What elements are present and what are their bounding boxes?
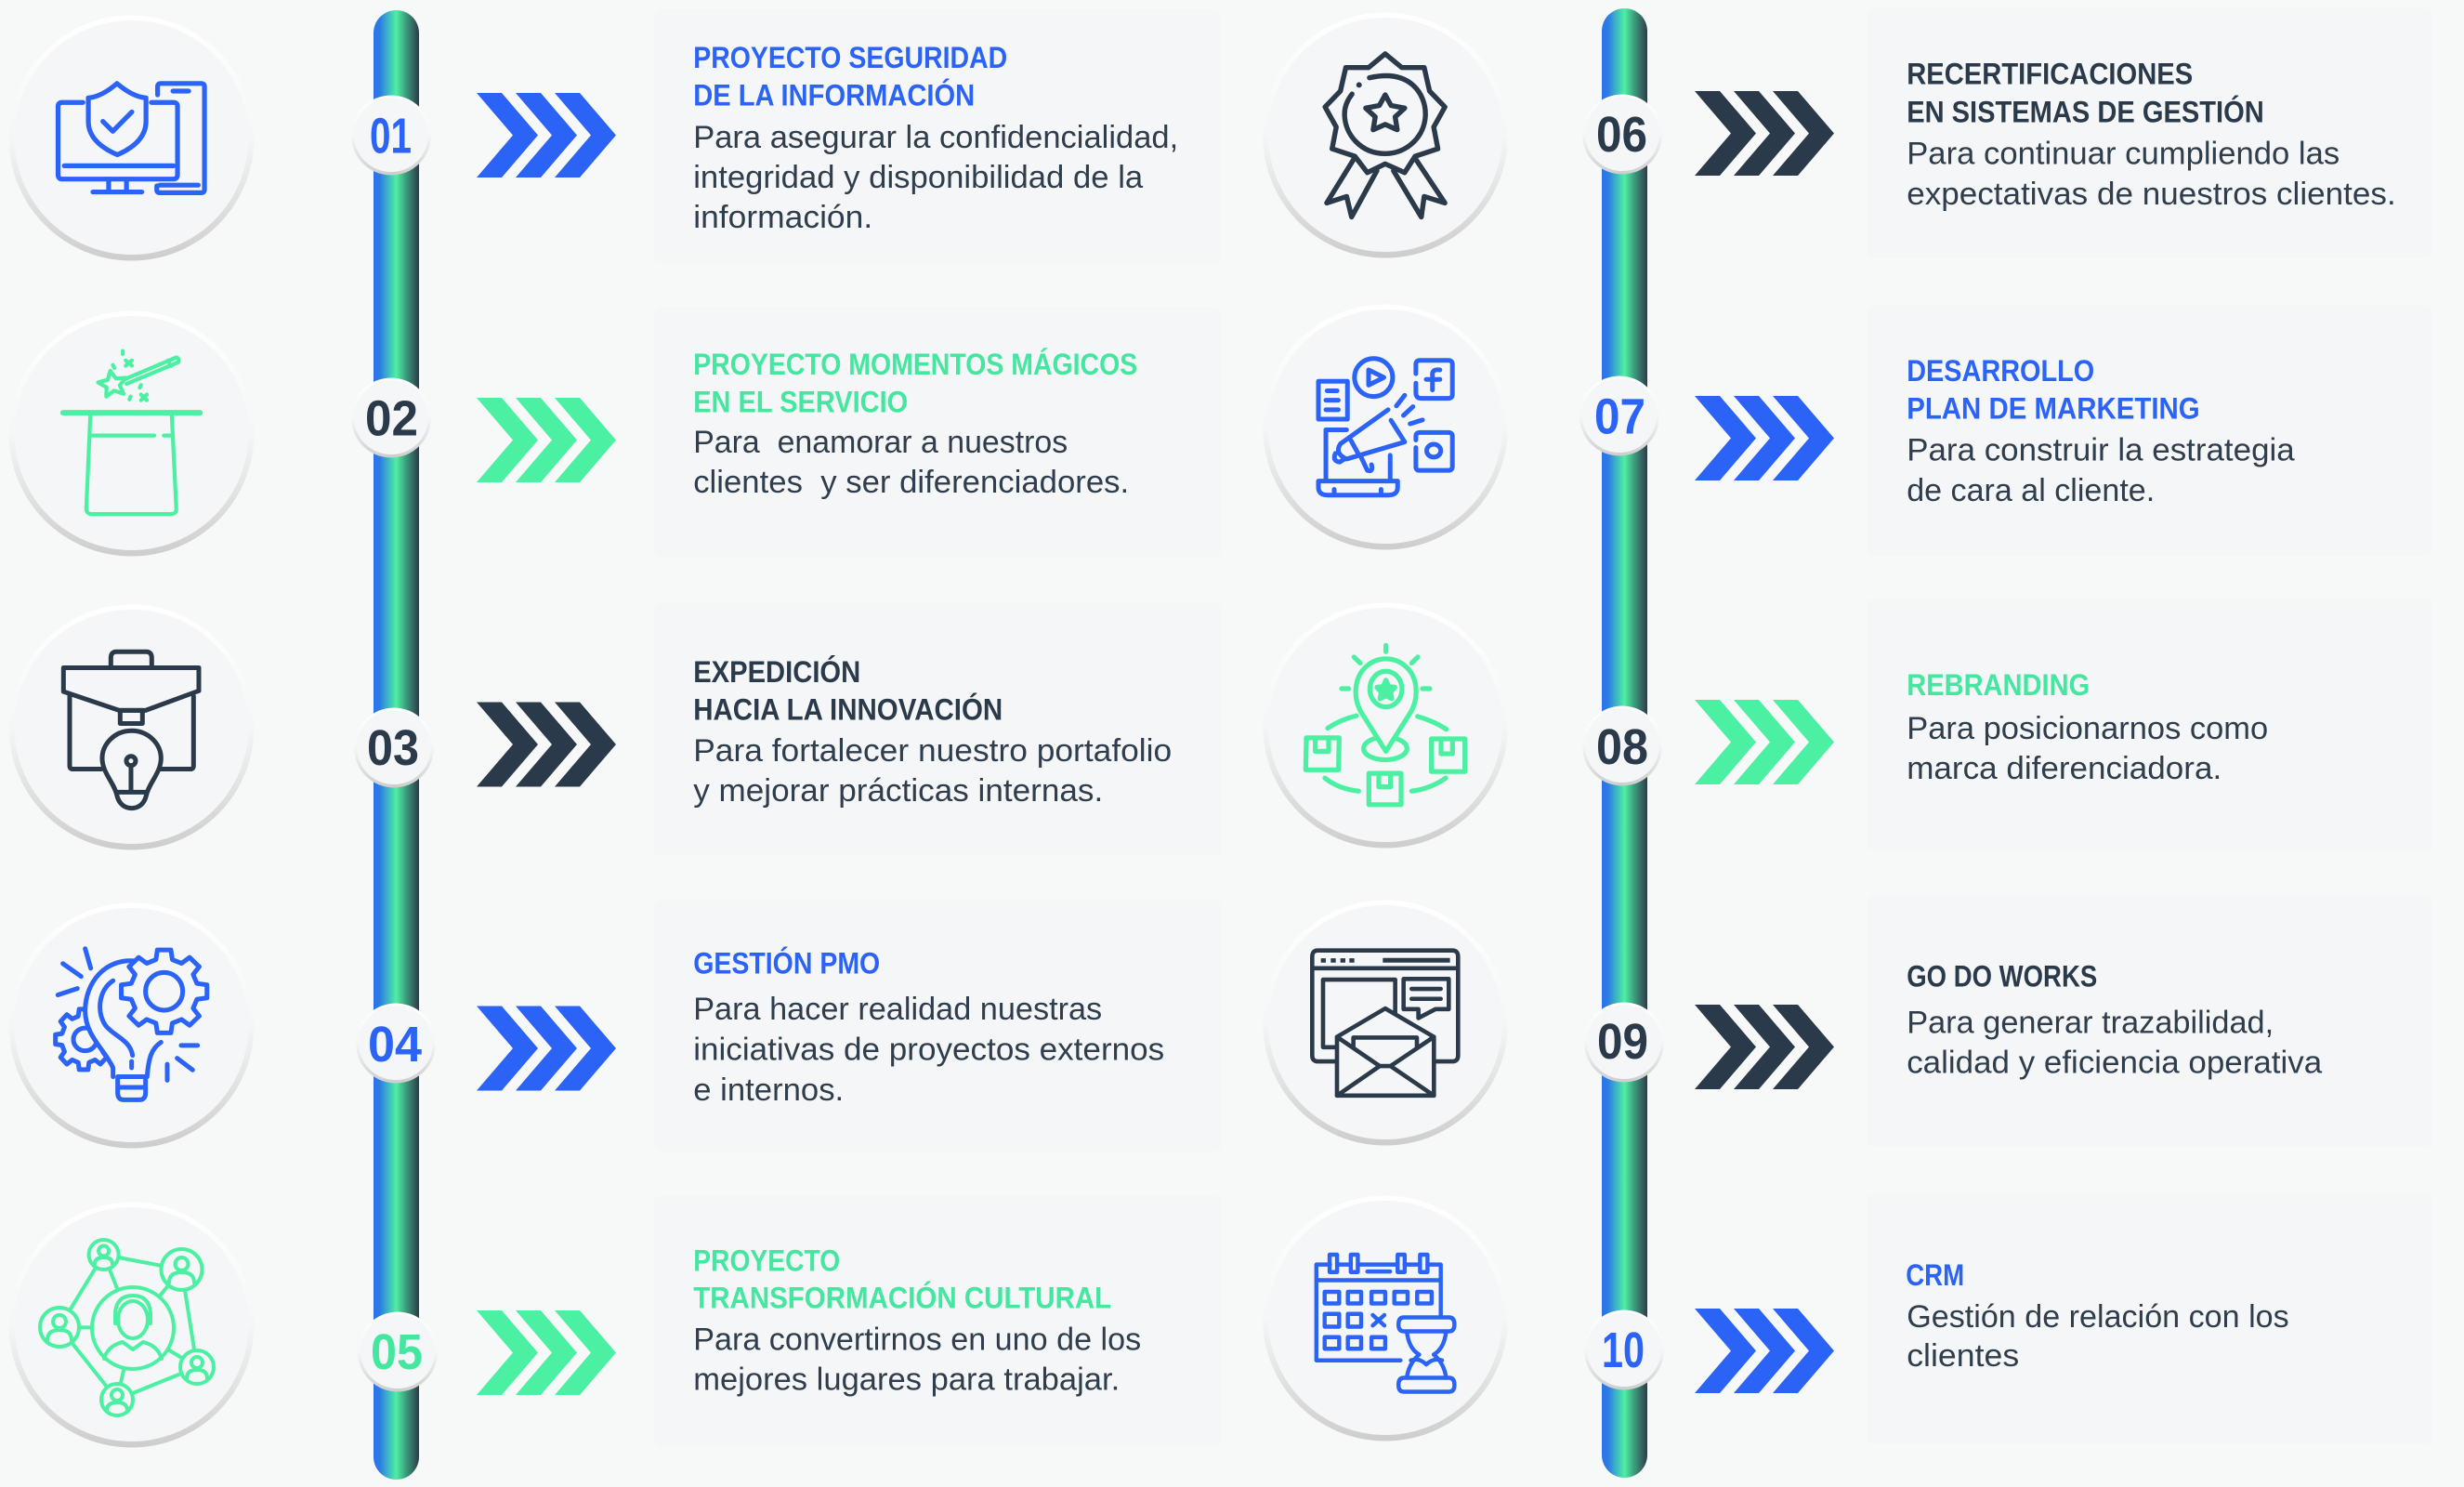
icon circle 09: email window [1263,900,1508,1145]
description 10: Gestión de relación con los [1907,1299,2289,1335]
number badge 06 [1582,95,1662,175]
description 07 [1907,433,2296,508]
icon circle 07: digital marketing [1263,305,1508,550]
description 04: Para hacer realidad nuestras [693,992,1102,1027]
description 09: Para generar trazabilidad, [1907,1006,2274,1041]
number badge 05: 05 [371,1324,423,1380]
card 01 [654,9,1221,263]
number badge 06: 06 [1596,107,1647,163]
icon circle 06: award rosette [1263,13,1508,258]
description 05 [693,1322,1141,1398]
description 03: Para fortalecer nuestro portafolio [693,733,1172,769]
heading 01: PROYECTO SEGURIDAD [693,41,1007,74]
description 03: y mejorar prácticas internas. [693,773,1103,809]
description 08: Para posicionarnos como [1907,711,2268,746]
description 06: expectativas de nuestros clientes. [1907,177,2396,212]
card 04 [654,900,1222,1151]
chevrons 02 [477,398,616,482]
heading 02: PROYECTO MOMENTOS MÁGICOS [693,348,1137,381]
icon circle 05: people network [9,1203,255,1448]
number badge 02: 02 [365,390,418,446]
chevrons 10 [1695,1309,1834,1393]
number badge 10: 10 [1602,1323,1645,1378]
description 07: Para construir la estrategia [1907,433,2296,468]
number badge 03: 03 [367,720,419,776]
heading 10: CRM [1906,1258,1964,1292]
heading 01: DE LA INFORMACIÓN [693,78,975,112]
icon circle 04: gears and bulb [9,903,255,1149]
heading 01 [693,41,1007,112]
icon circle 01: security devices [9,15,255,260]
icon circle 02: magic hat [9,310,255,556]
description 02 [693,425,1129,500]
heading 03: EXPEDICIÓN [693,655,860,689]
description 01: integridad y disponibilidad de la [693,160,1144,195]
description 06: Para continuar cumpliendo las [1907,136,2339,171]
number badge 08 [1582,706,1662,786]
description 10 [1907,1299,2289,1374]
description 04: e internos. [693,1072,844,1108]
chevrons 09 [1695,1005,1834,1089]
number badge 07 [1579,375,1659,455]
icon circle 08: location with packages [1263,602,1508,848]
chevrons 08 [1695,700,1834,784]
number badge 05 [358,1312,438,1392]
heading 02 [693,348,1137,418]
number badge 01 [351,95,431,175]
timeline bar right [1602,8,1647,1478]
description 08 [1907,711,2268,786]
description 01 [693,120,1178,235]
icon circle 10: calendar with hourglass [1263,1195,1508,1441]
description 05: Para convertirnos en uno de los [693,1322,1141,1357]
chevrons 04 [477,1006,616,1091]
heading 05 [693,1244,1111,1314]
description 01: información. [693,200,872,235]
card 08 [1867,599,2432,850]
chevrons 07 [1695,396,1834,480]
heading 05: TRANSFORMACIÓN CULTURAL [693,1281,1111,1314]
heading 07: DESARROLLO [1907,354,2094,388]
chevrons 03 [477,703,616,786]
heading 06: EN SISTEMAS DE GESTIÓN [1907,95,2264,128]
heading 09: GO DO WORKS [1907,959,2097,993]
description 07: de cara al cliente. [1907,473,2155,508]
number badge 04: 04 [368,1017,422,1072]
number badge 01: 01 [370,108,412,164]
description 05: mejores lugares para trabajar. [693,1362,1120,1398]
description 02: clientes y ser diferenciadores. [693,465,1129,500]
chevrons 05 [477,1310,616,1395]
number badge 08: 08 [1596,719,1648,775]
timeline bar left [374,10,419,1480]
heading 08: REBRANDING [1907,668,2090,702]
heading 06 [1907,58,2264,128]
heading 03 [693,655,1003,727]
description 03 [693,733,1172,809]
icon circle 03: briefcase with bulb [9,604,255,849]
description 09: calidad y eficiencia operativa [1907,1045,2323,1080]
number badge 07: 07 [1594,388,1645,444]
card 02 [654,307,1222,558]
description 06 [1907,136,2396,212]
card 09 [1867,896,2432,1147]
heading 02: EN EL SERVICIO [693,385,908,418]
card 06 [1867,8,2432,258]
number badge 02 [351,377,431,457]
heading 07: PLAN DE MARKETING [1907,392,2200,426]
card 07 [1867,306,2432,556]
description 04: iniciativas de proyectos externos [693,1032,1164,1067]
number badge 10 [1584,1310,1664,1390]
description 02: Para enamorar a nuestros [693,425,1068,460]
number badge 04 [356,1004,436,1084]
number badge 09 [1584,1002,1664,1082]
heading 04: GESTIÓN PMO [693,946,880,980]
heading 03: HACIA LA INNOVACIÓN [693,693,1003,727]
description 08: marca diferenciadora. [1907,751,2222,786]
heading 06: RECERTIFICACIONES [1907,58,2193,91]
number badge 03 [354,708,434,788]
heading 07 [1907,354,2200,426]
description 01: Para asegurar la confidencialidad, [693,120,1178,155]
number badge 09: 09 [1597,1014,1648,1070]
card 05 [654,1195,1222,1447]
card 03 [654,602,1222,856]
heading 05: PROYECTO [693,1244,840,1277]
description 09 [1907,1006,2323,1080]
chevrons 06 [1695,91,1834,176]
description 10: clientes [1907,1338,2019,1374]
description 04 [693,992,1164,1108]
chevrons 01 [477,93,616,178]
card 10 [1867,1194,2432,1444]
